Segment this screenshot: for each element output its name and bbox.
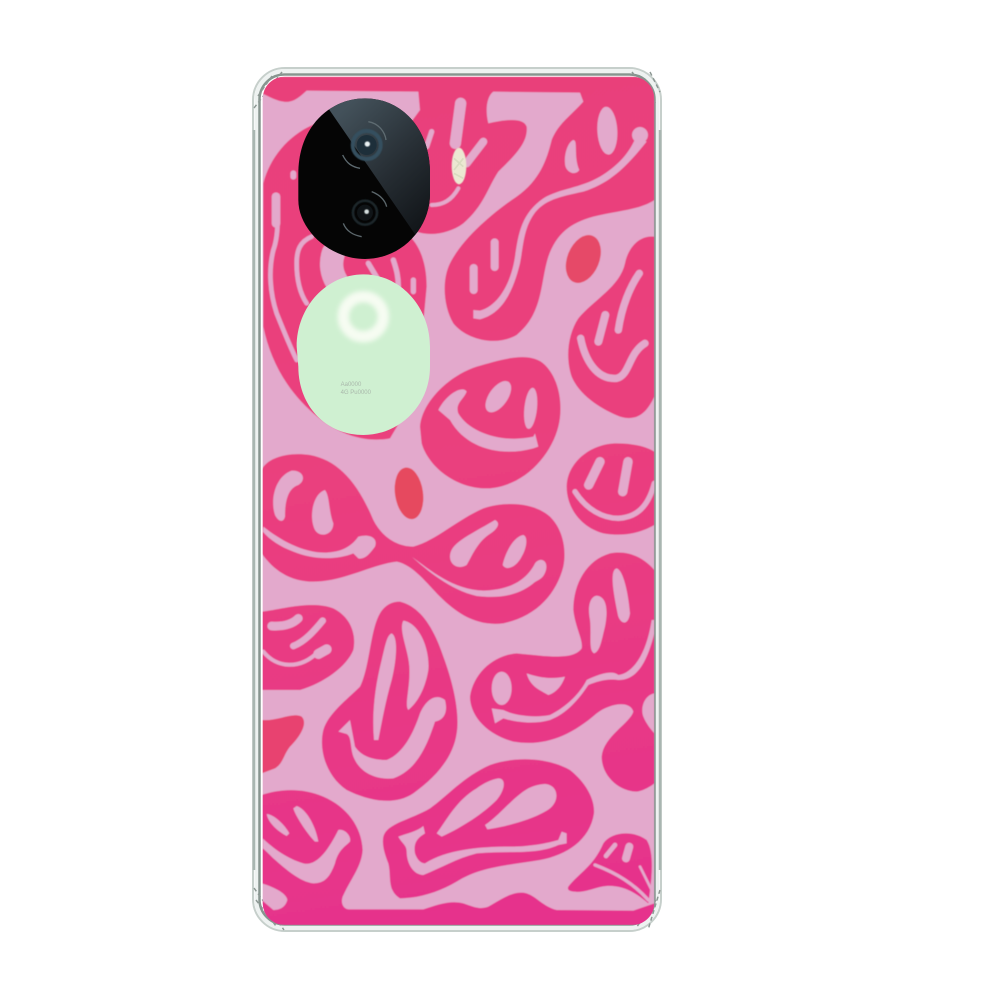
centre smiling face: [420, 357, 560, 488]
bottom left face details: [262, 806, 350, 910]
artwork background: [262, 77, 654, 925]
printed artwork: [262, 77, 654, 925]
flash: [452, 148, 466, 184]
tall tongue face: [322, 602, 458, 801]
right round face: [567, 443, 654, 535]
green charging module: [297, 274, 430, 435]
small lower right face details: [595, 845, 652, 900]
small left blob: [262, 715, 304, 773]
camera lighter glass panel: [329, 98, 430, 235]
tongue face details: [338, 621, 446, 779]
long S face details: [470, 106, 648, 319]
module small print: [341, 382, 372, 396]
camera lens lower: [343, 192, 387, 237]
right lower blended face: [470, 552, 654, 792]
centre face details: [438, 377, 539, 452]
bottom left face with base band: [262, 790, 654, 925]
spiral details: [270, 173, 413, 360]
phone case illustration: [252, 67, 662, 932]
right round face details: [575, 462, 654, 518]
top centre face details: [427, 103, 483, 205]
right face details: [581, 273, 645, 378]
camera lens upper: [343, 122, 386, 168]
lower left face details: [263, 618, 327, 665]
case frame: [253, 68, 661, 931]
big lower face details: [398, 778, 567, 875]
small lower right face: [568, 833, 652, 903]
infinity shaped double face: [262, 454, 565, 624]
red oval spot: [565, 234, 602, 284]
right melted face: [568, 237, 654, 418]
red oval spot lower: [394, 467, 424, 520]
lower left face: [262, 605, 354, 690]
right lower face details: [492, 568, 654, 733]
big spiral face: [263, 123, 427, 440]
camera module: [298, 93, 437, 259]
double face details: [263, 471, 546, 597]
module small print: 4G Pu0000: [341, 390, 372, 396]
module small print: Aa0000: [341, 382, 362, 388]
big lower face: [383, 759, 594, 898]
light ring: [343, 297, 383, 337]
top band and upper melted faces: [262, 77, 654, 341]
